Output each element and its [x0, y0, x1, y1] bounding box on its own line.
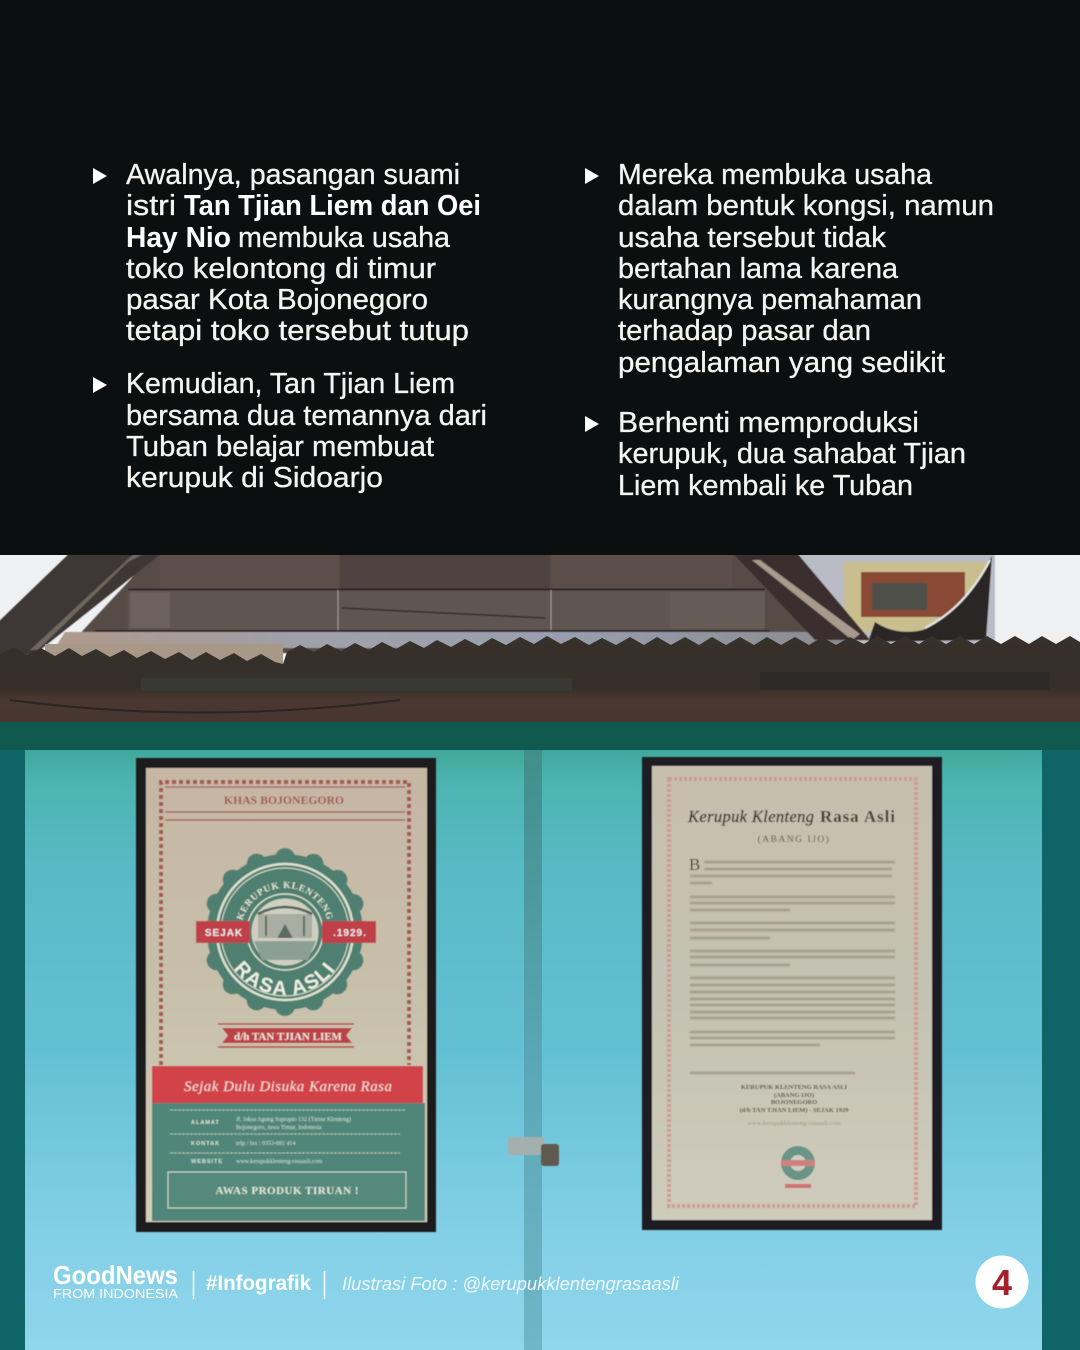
poster title [687, 807, 895, 845]
seal logo [206, 848, 364, 1016]
bullet: opening a grocery shop: pasar Kota Bojonegoro [126, 284, 428, 316]
bullet: learning to make kerupuk: kerupuk di Sidoarjo [126, 462, 383, 494]
red slogan band: Sejak Dulu Disuka Karena Rasa [184, 1079, 392, 1095]
ornamental border [161, 782, 409, 1065]
arrow marker [585, 416, 599, 432]
divider [194, 1271, 324, 1299]
poster title: Kerupuk Klenteng [687, 807, 814, 826]
arrow marker [93, 377, 107, 393]
page number badge: 4 [992, 1262, 1012, 1303]
footer branding [53, 1260, 680, 1301]
bullet: partnership business: usaha tersebut tidak [618, 222, 887, 254]
seal logo: KERUPUK KLENTENG [236, 880, 334, 921]
poster drop cap: B [689, 855, 700, 874]
bullet: production stopped: kerupuk, dua sahabat Tjian [618, 438, 966, 470]
ornamental border [669, 779, 916, 1206]
corrugated roof edge and wall [0, 636, 1080, 730]
poster sign-off: (ABANG IJO) [774, 1092, 814, 1099]
bullet: partnership business [585, 159, 994, 379]
GoodNews from Indonesia logo: FROM INDONESIA [53, 1287, 179, 1301]
bullet: learning to make kerupuk: bersama dua temannya dari [126, 400, 487, 432]
bullet: opening a grocery shop: Awalnya, pasangan suami [126, 159, 460, 191]
bullet: production stopped: Liem kembali ke Tuban [618, 470, 913, 502]
poster sign-off: BOJONEGORO [771, 1099, 817, 1106]
poster title: (ABANG IJO) [758, 834, 830, 845]
bullet: partnership business: dalam bentuk kongsi, namun [618, 190, 994, 222]
bullet: opening a grocery shop: membuka usaha [238, 222, 450, 254]
bullet: production stopped [585, 407, 966, 502]
green contact block: telp / fax : 0353-881 414 [236, 1140, 296, 1147]
sky and neighbouring building [0, 540, 1080, 665]
poster sign-off: www.kerupukklenteng-rasaasli.com [747, 1120, 841, 1127]
bullet: opening a grocery shop: Hay Nio [126, 222, 231, 254]
ribbon: Tan Tjian Liem: d/h TAN TJIAN LIEM [234, 1031, 343, 1043]
poster body paragraphs [690, 862, 895, 1073]
bullet: opening a grocery shop: istri [126, 190, 176, 222]
bullet: partnership business: pengalaman yang sedikit [618, 347, 945, 379]
page number badge [976, 1256, 1028, 1308]
ribbon: sejak 1929: SEJAK [205, 928, 243, 939]
bullet: learning to make kerupuk: Tuban belajar membuat [126, 431, 434, 463]
green contact block: www.kerupukklenteng-rasaasli.com [236, 1159, 323, 1165]
small seal logo [781, 1146, 815, 1188]
bullet: opening a grocery shop: toko kelontong di timur [126, 253, 437, 285]
GoodNews from Indonesia logo [53, 1260, 179, 1301]
green contact block: Bojonegoro, Jawa Timur, Indonesia [236, 1125, 322, 1131]
arrow marker [585, 168, 599, 184]
bullet: opening a grocery shop: tetapi toko tersebut tutup [126, 315, 469, 347]
photo credit: Ilustrasi Foto : @kerupukklentengrasaasli [342, 1274, 680, 1294]
arrow marker [93, 168, 107, 184]
bullet: production stopped: Berhenti memproduksi [618, 407, 919, 439]
door panels [25, 750, 1042, 1350]
door latch [508, 1137, 559, 1166]
bullet: partnership business: bertahan lama karena [618, 253, 898, 285]
poster heading: KHAS BOJONEGORO [224, 795, 344, 807]
poster: Kerupuk Klenteng logo [135, 757, 437, 1233]
GoodNews from Indonesia logo: GoodNews [53, 1260, 178, 1290]
green contact block: Jl. Jaksa Agung Suprapto 132 (Timur Klenteng) [236, 1116, 351, 1123]
poster sign-off [739, 1084, 849, 1127]
teal door frame [0, 722, 1080, 1350]
green contact block: WEBSITE [191, 1159, 223, 1165]
photo: shop front with posters [0, 555, 1080, 1350]
seal logo: RASA ASLI [234, 960, 335, 996]
bullet: opening a grocery shop: Tan Tjian Liem dan Oei [184, 190, 481, 222]
hashtag: #Infografik [206, 1272, 311, 1295]
bullet: partnership business: kurangnya pemahaman [618, 284, 922, 316]
green contact block: AWAS PRODUK TIRUAN ! [216, 1185, 358, 1197]
light strip behind roof edge [45, 644, 283, 668]
bullet list: right column [585, 159, 994, 502]
green contact block: ALAMAT [191, 1120, 220, 1126]
bullet: partnership business: Mereka membuka usaha [618, 159, 932, 191]
bullet list: left column [93, 159, 487, 494]
ribbon: Tan Tjian Liem [218, 1024, 354, 1047]
poster title: Rasa Asli [820, 807, 895, 826]
poster: history text [642, 757, 942, 1230]
bullet: opening a grocery shop [93, 159, 481, 347]
poster sign-off: (d/h TAN TJIAN LIEM) - SEJAK 1929 [739, 1107, 849, 1114]
ribbon: sejak 1929 [196, 921, 376, 943]
dark text panel background [0, 0, 1080, 555]
bullet: partnership business: terhadap pasar dan [618, 315, 871, 347]
green contact block [152, 1103, 425, 1221]
bullet: learning to make kerupuk: Kemudian, Tan Tjian Liem [126, 368, 455, 400]
red slogan band [152, 1066, 423, 1103]
bullet: learning to make kerupuk [93, 368, 487, 494]
poster sign-off: KERUPUK KLENTENG RASA ASLI [741, 1084, 848, 1091]
green contact block: KONTAK [191, 1141, 220, 1147]
roof gable [0, 545, 870, 660]
ribbon: sejak 1929: .1929. [333, 928, 367, 939]
